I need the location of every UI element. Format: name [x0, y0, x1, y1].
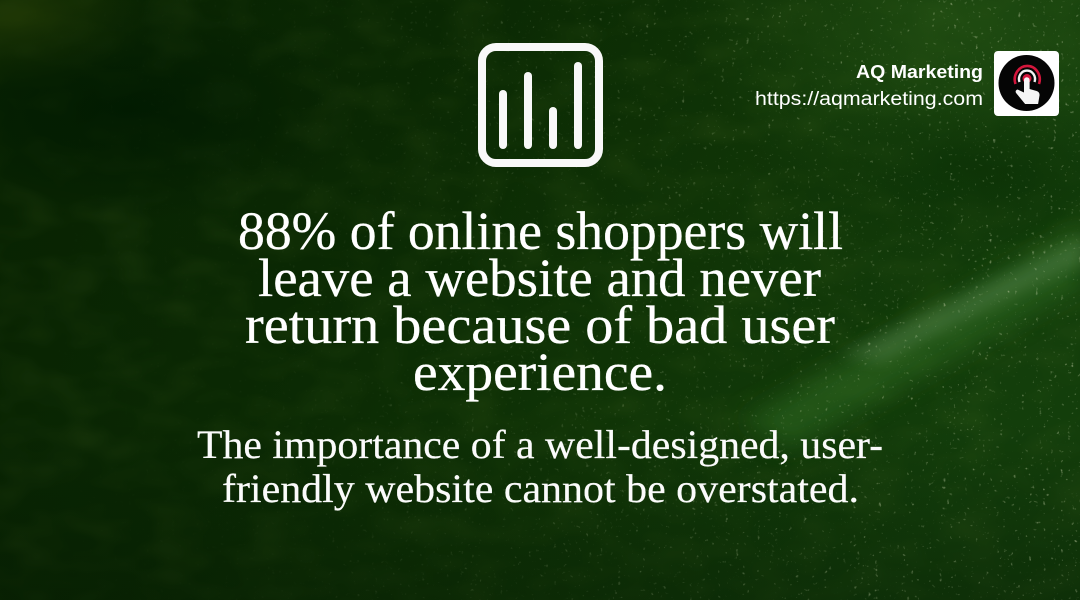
headline: 88% of online shoppers will	[238, 201, 843, 261]
subheading: The importance of a well-designed, user-	[197, 422, 883, 467]
brand text: AQ Marketing	[755, 62, 983, 110]
logo: tapping hand on black circle	[994, 51, 1059, 116]
brand text: AQ Marketing: AQ Marketing	[856, 62, 983, 82]
subheading	[197, 422, 883, 511]
headline: leave a website and never	[258, 248, 821, 308]
subheading: friendly website cannot be overstated.	[222, 466, 859, 511]
brand text: AQ Marketing: https://aqmarketing.com	[755, 89, 983, 110]
headline: experience.	[413, 342, 667, 402]
icon: bar chart in rounded square	[482, 47, 599, 163]
headline: return because of bad user	[245, 295, 835, 355]
headline	[238, 201, 843, 402]
